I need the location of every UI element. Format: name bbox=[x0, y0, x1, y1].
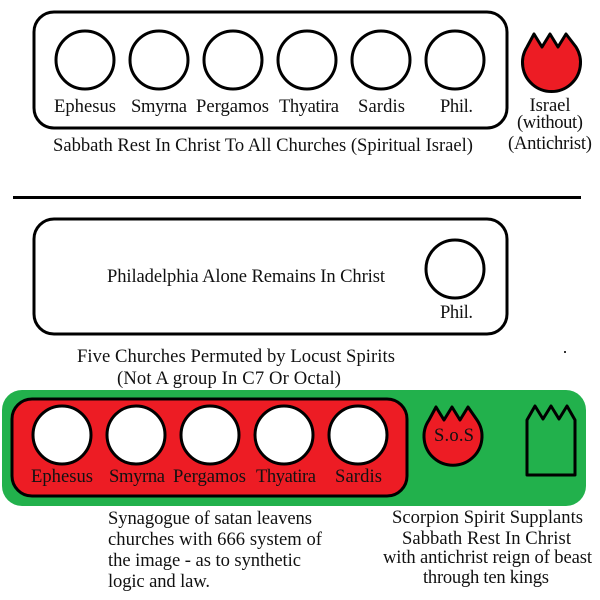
text: synagogue of satan: logic and law. bbox=[108, 571, 210, 592]
church: Ephesus bbox=[31, 406, 93, 487]
church: Sardis: Sardis bbox=[358, 96, 405, 117]
icon: green crowned house bbox=[527, 406, 575, 475]
church: Pergamos: Pergamos bbox=[196, 96, 269, 117]
church: Thyatira bbox=[255, 406, 316, 487]
church: Phil.: Phil. bbox=[440, 96, 473, 117]
text: scorpion spirit: with antichrist reign of beast bbox=[383, 547, 593, 568]
church: Sardis bbox=[329, 406, 387, 487]
text: synagogue of satan bbox=[108, 508, 323, 592]
text: scorpion spirit: Sabbath Rest In Christ bbox=[402, 528, 572, 549]
church: Smyrna bbox=[130, 31, 188, 117]
church: Phil.: Phil. bbox=[440, 302, 473, 323]
caption: Sabbath rest: Sabbath Rest In Christ To All Churches (Spiritual Israel) bbox=[53, 135, 473, 156]
icon: Israel crowned red circle bbox=[522, 34, 580, 92]
label: Israel without Antichrist: Israel bbox=[530, 95, 570, 116]
church: Smyrna bbox=[107, 406, 165, 487]
text: scorpion spirit: Scorpion Spirit Supplants bbox=[392, 507, 583, 528]
text: synagogue of satan: churches with 666 system of bbox=[108, 529, 323, 550]
church: Pergamos bbox=[196, 31, 269, 117]
church: Ephesus: Ephesus bbox=[54, 96, 116, 117]
church: Thyatira bbox=[278, 31, 339, 117]
label: Israel without Antichrist: (Antichrist) bbox=[508, 133, 592, 154]
church: Pergamos: Pergamos bbox=[173, 466, 246, 487]
church: Ephesus: Ephesus bbox=[31, 466, 93, 487]
caption: five churches permuted bbox=[77, 346, 395, 389]
label: Israel without Antichrist: (without) bbox=[517, 112, 583, 133]
church: Sardis bbox=[352, 31, 410, 117]
icon: S.o.S crowned red circle: S.o.S bbox=[434, 425, 474, 446]
church: Phil. bbox=[426, 31, 484, 117]
church: Ephesus bbox=[54, 31, 116, 117]
panel: green region bbox=[2, 390, 586, 506]
church: Pergamos bbox=[173, 406, 246, 487]
church: Smyrna: Smyrna bbox=[131, 96, 187, 117]
text: scorpion spirit: through ten kings bbox=[423, 567, 549, 588]
panel: red synagogue box bbox=[12, 399, 407, 496]
church: Thyatira: Thyatira bbox=[256, 466, 316, 487]
church: Thyatira: Thyatira bbox=[279, 96, 339, 117]
caption: five churches permuted: Five Churches Permuted by Locust Spirits bbox=[77, 346, 395, 367]
church: Smyrna: Smyrna bbox=[109, 466, 165, 487]
text: scorpion spirit bbox=[383, 507, 593, 588]
text: synagogue of satan: Synagogue of satan leavens bbox=[108, 508, 312, 529]
caption: five churches permuted: (Not A group In C7 Or Octal) bbox=[117, 368, 341, 389]
text: synagogue of satan: the image - as to synthetic bbox=[108, 550, 301, 571]
panel: Philadelphia alone bbox=[34, 219, 507, 334]
church: Sardis: Sardis bbox=[335, 466, 382, 487]
church: Phil. bbox=[426, 240, 484, 323]
icon: S.o.S crowned red circle bbox=[424, 407, 482, 465]
text: Philadelphia alone remains: Philadelphia Alone Remains In Christ bbox=[107, 266, 386, 287]
label: Israel without Antichrist bbox=[508, 95, 592, 154]
panel: all churches in Christ bbox=[34, 12, 507, 128]
